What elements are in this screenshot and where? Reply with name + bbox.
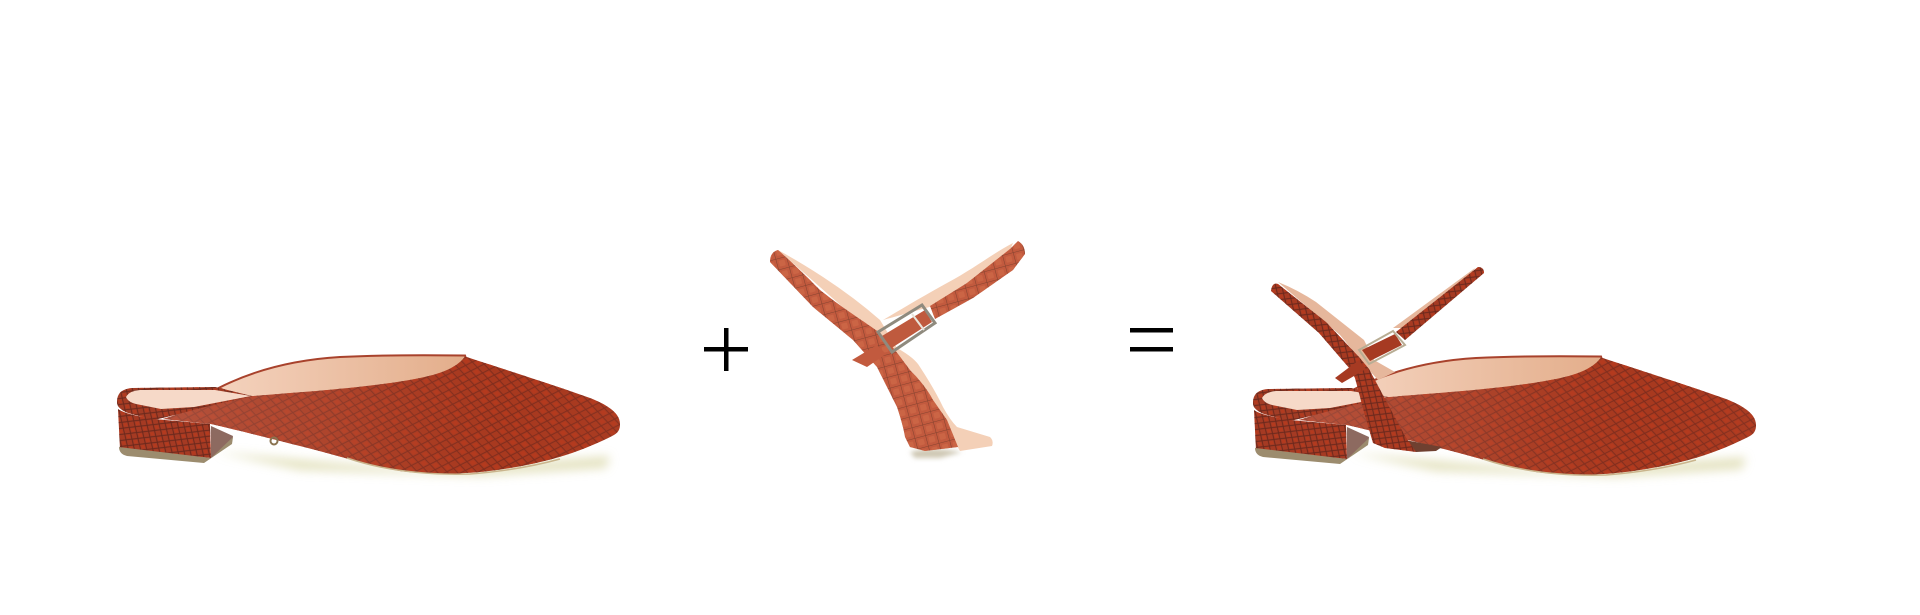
icon: buckle [878, 305, 935, 352]
front strap [1396, 267, 1484, 340]
shoe: mule without strap [117, 355, 620, 476]
strap lining [778, 250, 993, 451]
back strap and heel panel [1271, 284, 1416, 452]
icon: plus sign [704, 328, 748, 371]
strap lining [1278, 282, 1395, 380]
icon: tab [852, 345, 886, 367]
back strap and heel panel [770, 250, 958, 451]
icon: equals sign [1130, 328, 1173, 352]
icon: buckle [1359, 331, 1405, 364]
shoe: slingback result (mule with strap attached) [1253, 267, 1756, 477]
strap end under the arch [1405, 440, 1442, 452]
detachable strap [770, 241, 1025, 458]
front strap lining [883, 243, 1013, 320]
tab [1335, 360, 1366, 383]
front strap [930, 241, 1025, 319]
icon: small buckle hanging under the arch [270, 438, 278, 444]
front strap lining [1393, 268, 1475, 328]
